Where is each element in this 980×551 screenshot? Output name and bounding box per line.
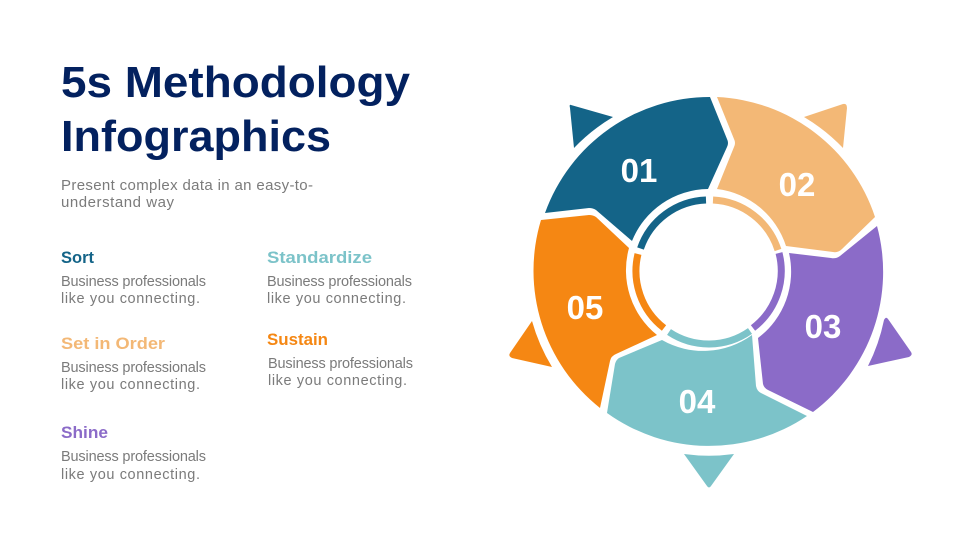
title: Infographics [61, 112, 331, 161]
text block: Sustain: like you connecting. [268, 373, 407, 389]
segment 04 [607, 335, 807, 446]
text block: Sort [61, 248, 206, 307]
cycle diagram [509, 97, 912, 488]
segment 01: 01 [621, 152, 657, 189]
text block: Sort: Business professionals [61, 274, 206, 290]
arrow 03 [868, 318, 912, 366]
subtitle [61, 177, 313, 211]
segment 03: 03 [805, 308, 841, 345]
segment 02 [717, 97, 875, 252]
text block: Sustain: Business professionals [268, 356, 413, 372]
text block: Standardize: like you connecting. [267, 291, 406, 307]
text block: Shine: like you connecting. [61, 467, 200, 483]
text block: Sort: Sort [61, 248, 94, 267]
text block: Set in Order [61, 334, 206, 393]
text block: Sort: like you connecting. [61, 291, 200, 307]
title: 5s Methodology [61, 58, 411, 107]
subtitle: Present complex data in an easy-to- [61, 177, 313, 194]
text block: Sustain [267, 330, 413, 389]
title [61, 58, 411, 161]
text block: Sustain: Sustain [267, 330, 328, 349]
segment 03 [758, 226, 883, 412]
arrow 04 [684, 454, 734, 488]
text block: Shine: Business professionals [61, 449, 206, 465]
arrow 02 [804, 104, 847, 148]
segment 05 [533, 215, 657, 408]
text block: Standardize [267, 248, 412, 307]
arrow 05 [509, 321, 552, 367]
subtitle: understand way [61, 194, 174, 211]
segment 01 [545, 97, 728, 241]
segment 05: 05 [567, 289, 603, 326]
segment 04: 04 [679, 383, 716, 420]
text block: Shine: Shine [61, 423, 108, 442]
inner ring arcs [636, 200, 781, 344]
text block: Set in Order: like you connecting. [61, 377, 200, 393]
text block: Standardize: Standardize [267, 248, 372, 267]
segment 02: 02 [779, 166, 815, 203]
text block: Set in Order: Business professionals [61, 360, 206, 376]
text block: Shine [61, 423, 206, 483]
text block: Set in Order: Set in Order [61, 334, 165, 353]
arrow 01 [570, 105, 613, 148]
text block: Standardize: Business professionals [267, 274, 412, 290]
